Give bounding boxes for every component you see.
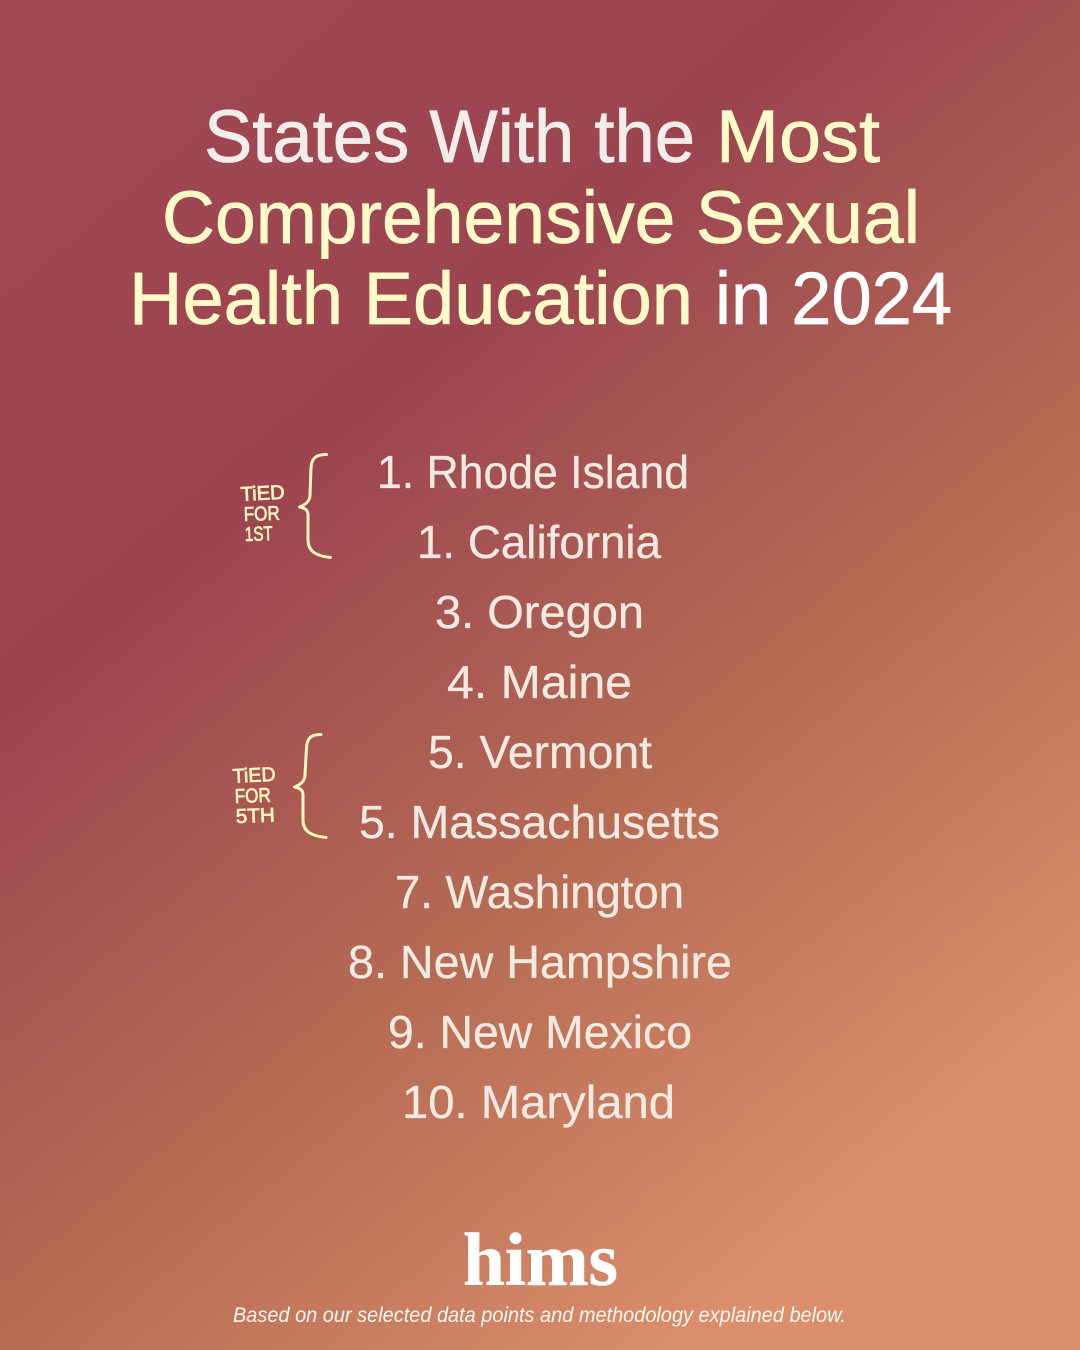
logo: hims: hims	[463, 1219, 618, 1302]
footnote: Based on our selected data points and methodology explained below.	[233, 1304, 846, 1327]
ranked list of states: 4. Maine	[447, 656, 632, 708]
ranked list of states: 8. New Hampshire	[348, 936, 732, 988]
annotation: tied for 5th	[232, 734, 326, 838]
ranked list of states: 5. Massachusetts	[359, 796, 720, 848]
ranked list of states: 9. New Mexico	[388, 1006, 692, 1058]
annotation: tied for 5th: 5TH	[235, 805, 275, 828]
title: Health Education	[129, 257, 693, 340]
ranked list of states: 10. Maryland	[402, 1076, 675, 1128]
annotation: tied for 1st	[240, 454, 330, 558]
title: Comprehensive Sexual	[162, 176, 920, 259]
title: in 2024	[715, 257, 952, 340]
ranked list of states: 3. Oregon	[435, 586, 644, 638]
ranked list of states: 1. Rhode Island	[377, 446, 689, 498]
title: States With the	[204, 95, 695, 178]
title	[129, 95, 952, 340]
ranked list of states: 7. Washington	[395, 866, 684, 918]
annotation: tied for 1st: FOR	[243, 503, 280, 526]
ranked list of states: 1. California	[417, 516, 661, 568]
annotation: tied for 1st: 1ST	[244, 523, 273, 546]
ranked list of states	[348, 446, 732, 1128]
annotation: tied for 5th: FOR	[234, 785, 271, 808]
annotation: tied for 5th: TiED	[232, 764, 276, 788]
annotation: tied for 1st: TiED	[240, 482, 285, 506]
ranked list of states: 5. Vermont	[428, 726, 652, 778]
title: Most	[716, 95, 880, 178]
